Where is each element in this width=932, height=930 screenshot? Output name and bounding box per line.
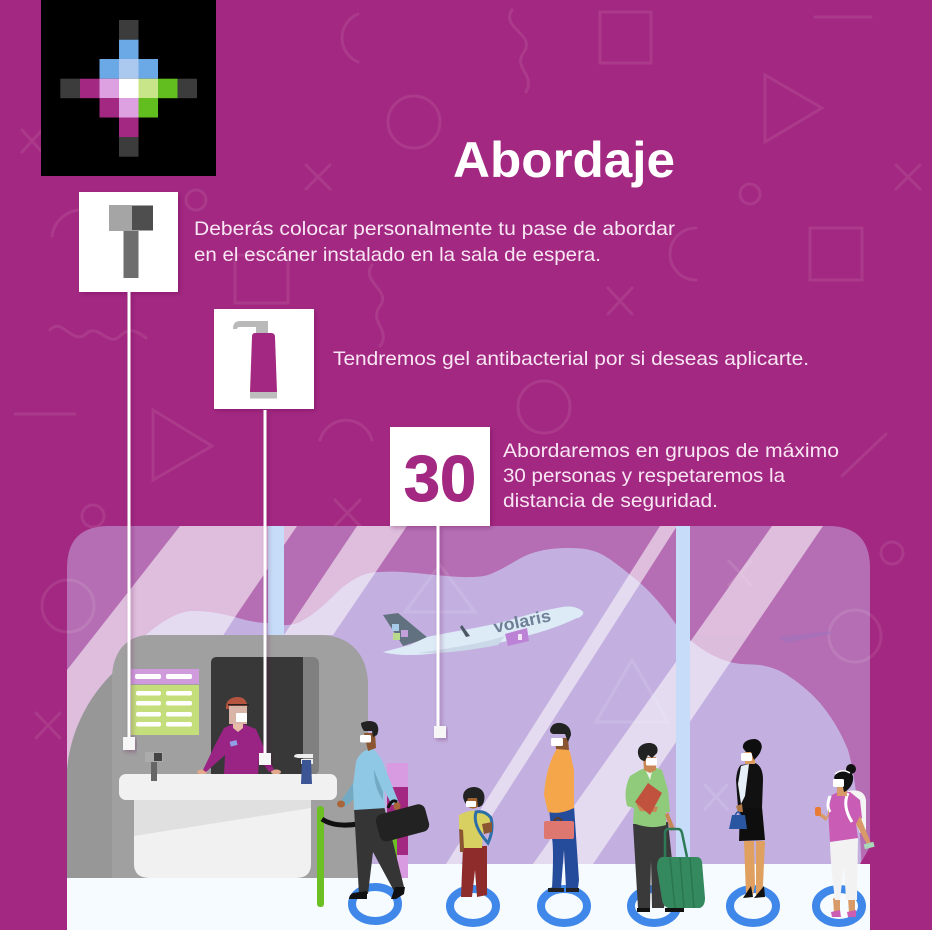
window pillars <box>268 526 690 866</box>
card 3: group size 30 <box>390 427 490 526</box>
text: scanner instruction <box>194 218 676 266</box>
floor distance rings <box>352 887 862 923</box>
connector line 1 <box>123 292 135 750</box>
text: boarding groups <box>503 440 839 512</box>
mini scanner on counter <box>145 752 163 781</box>
text: boarding groups: Abordaremos en grupos de máximo <box>503 440 839 462</box>
airplane: volaris <box>492 606 553 637</box>
passenger 2: child with backpack <box>459 787 492 897</box>
gel dispenser on counter <box>294 754 313 784</box>
passenger 6: woman with white backpack <box>815 764 875 917</box>
floor <box>67 864 870 930</box>
agent behind counter <box>197 697 281 775</box>
text: scanner instruction: en el escáner instalado en la sala de espera. <box>194 244 601 266</box>
stanchion poles <box>317 806 397 907</box>
diagonal light reflections <box>67 526 823 864</box>
card 2: gel bottle icon <box>214 309 314 409</box>
flight schedule board <box>131 669 199 735</box>
connector line 2 <box>259 410 271 765</box>
text: scanner instruction: Deberás colocar personalmente tu pase de abordar <box>194 218 676 240</box>
text: boarding groups: 30 personas y respetaremos la <box>503 465 785 487</box>
card 3: group size 30: 30 <box>404 442 476 515</box>
cloud backdrop <box>140 548 862 880</box>
passenger 3: man with coral bag <box>544 723 579 892</box>
passenger 5: woman in black suit <box>729 739 765 898</box>
check-in booth <box>67 635 368 878</box>
airplane <box>383 606 583 655</box>
title: Abordaje <box>453 132 675 188</box>
text: antibacterial gel: Tendremos gel antibacterial por si deseas aplicarte. <box>333 348 809 370</box>
passenger 1: man with black bag <box>322 721 431 899</box>
scene: airport window <box>42 526 881 880</box>
logo <box>41 0 216 176</box>
text: boarding groups: distancia de seguridad. <box>503 490 718 512</box>
card 1: scanner icon <box>79 192 178 292</box>
faint shapes in window <box>67 559 870 664</box>
pixel sign behind queue <box>387 763 408 878</box>
connector line 3 <box>434 526 446 738</box>
counter <box>119 774 337 878</box>
passenger 4: man with green suitcase <box>626 743 705 912</box>
